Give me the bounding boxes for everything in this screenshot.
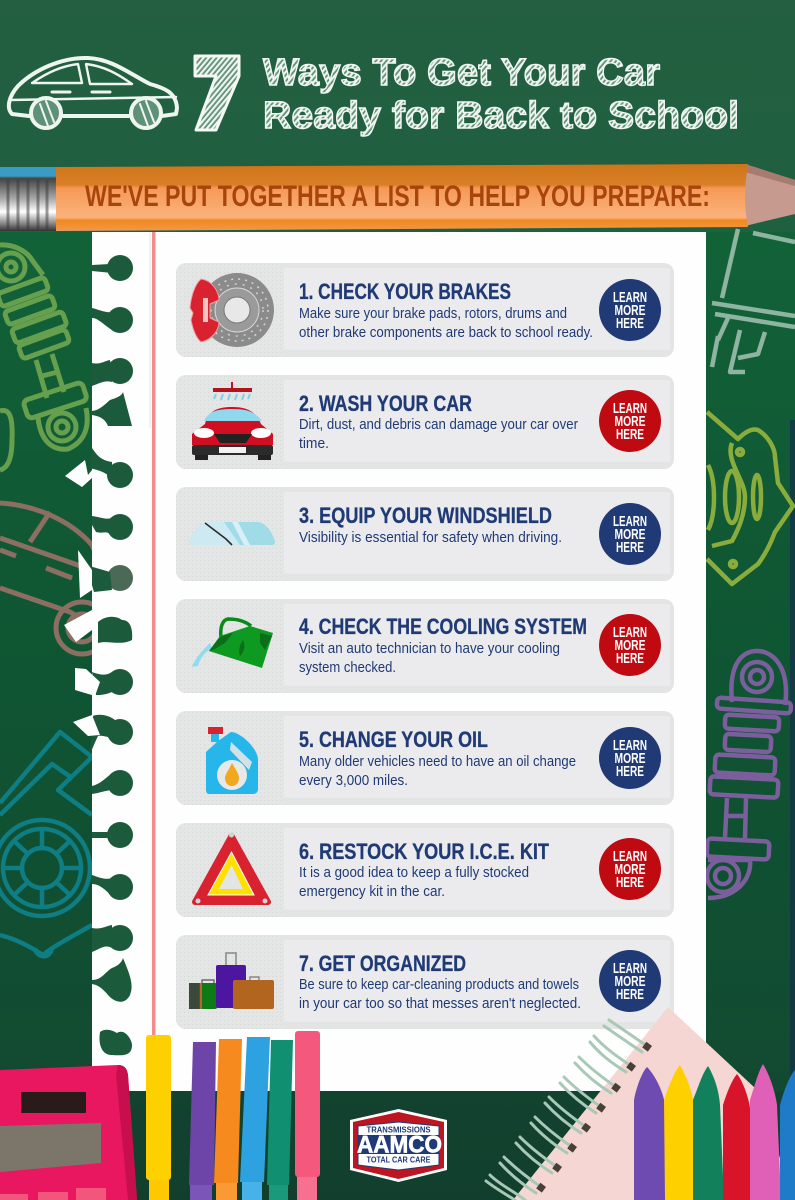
description: It is a good idea to keep a fully stocked	[299, 865, 529, 881]
title	[9, 52, 739, 137]
button: learn more here: MORE	[614, 751, 646, 767]
pink crayon	[750, 1064, 781, 1200]
paper sheet	[64, 232, 706, 1091]
headline: Ready for Back to School	[263, 95, 739, 137]
calculator	[0, 1065, 137, 1200]
button: learn more here	[599, 614, 661, 676]
pencil body	[56, 164, 748, 231]
AAMCO logo: TRANSMISSIONS	[366, 1124, 431, 1134]
description: time.	[299, 436, 329, 452]
description	[299, 865, 529, 900]
button: learn more here: HERE	[616, 427, 644, 443]
button: learn more here: MORE	[614, 638, 646, 654]
description: other brake components are back to school ready.	[299, 325, 593, 341]
button: learn more here: LEARN	[613, 290, 647, 306]
button: learn more here	[599, 950, 661, 1012]
pink marker	[295, 1031, 320, 1200]
description: Visit an auto technician to have your cooling	[299, 641, 560, 657]
icon: brake disc	[190, 273, 274, 347]
panel: 6 restock your ice kit	[176, 823, 674, 917]
button: learn more here: HERE	[616, 540, 644, 556]
heading: 6. RESTOCK YOUR I.C.E. KIT	[299, 839, 549, 864]
button: learn more here: LEARN	[613, 961, 647, 977]
button: learn more here: LEARN	[613, 849, 647, 865]
heading: 3. EQUIP YOUR WINDSHIELD	[299, 503, 552, 528]
red crayon	[723, 1074, 753, 1200]
button: learn more here: HERE	[616, 875, 644, 891]
AAMCO logo	[350, 1109, 447, 1182]
chalk doodle: purple shock absorber right	[707, 651, 791, 898]
button: learn more here	[599, 390, 661, 452]
description	[299, 641, 560, 676]
green crayon	[693, 1066, 724, 1200]
button: learn more here: LEARN	[613, 625, 647, 641]
description	[299, 977, 581, 1012]
button: learn more here: LEARN	[613, 514, 647, 530]
heading: 4. CHECK THE COOLING SYSTEM	[299, 614, 587, 639]
markers	[146, 1031, 320, 1200]
panel: 4 check the cooling system	[176, 599, 674, 693]
heading: 1. CHECK YOUR BRAKES	[299, 279, 511, 304]
yellow crayon	[664, 1065, 696, 1200]
chalk doodle: green shock absorber	[0, 245, 88, 470]
headline: Ways To Get Your Car	[263, 52, 660, 94]
button: learn more here: LEARN	[613, 738, 647, 754]
button: learn more here	[599, 503, 661, 565]
heading: 2. WASH YOUR CAR	[299, 391, 472, 416]
pencil tip	[745, 164, 795, 226]
blue marker	[240, 1037, 270, 1200]
chalk doodle: brown car	[0, 503, 108, 654]
description: in your car too so that messes aren't neglected.	[299, 996, 581, 1012]
icon: luggage	[189, 953, 274, 1009]
yellow marker	[146, 1035, 171, 1200]
panel: 1 check your brakes	[176, 263, 674, 357]
icon: oil container	[206, 727, 258, 794]
AAMCO logo: AAMCO	[357, 1132, 442, 1158]
chalk doodle: grey parts top right	[712, 229, 795, 372]
description: Visibility is essential for safety when driving.	[299, 530, 562, 546]
pencil ferrule	[0, 167, 56, 231]
panel: 2 wash your car	[176, 375, 674, 469]
description: Be sure to keep car-cleaning products and towels	[299, 977, 579, 993]
blue crayon	[780, 1070, 795, 1200]
icon: chalk car	[9, 58, 177, 128]
description: Make sure your brake pads, rotors, drums and	[299, 306, 567, 322]
green marker	[267, 1040, 293, 1200]
crayons	[634, 1064, 795, 1200]
icon: warning triangle	[195, 832, 268, 904]
button: learn more here: MORE	[614, 862, 646, 878]
description	[299, 306, 593, 341]
description: Dirt, dust, and debris can damage your car over	[299, 417, 578, 433]
headline	[263, 52, 739, 137]
panel: 7 get organized	[176, 935, 674, 1029]
description	[299, 754, 576, 789]
icon: car being washed	[192, 382, 273, 460]
panel: 3 equip your windshield	[176, 487, 674, 581]
orange marker	[214, 1039, 242, 1200]
notebook holes	[86, 255, 133, 1055]
button: learn more here: MORE	[614, 974, 646, 990]
purple crayon	[634, 1067, 667, 1200]
button: learn more here	[599, 838, 661, 900]
button: learn more here: HERE	[616, 651, 644, 667]
button: learn more here: LEARN	[613, 401, 647, 417]
button: learn more here: HERE	[616, 987, 644, 1003]
button: learn more here: HERE	[616, 764, 644, 780]
large numeral 7	[195, 56, 239, 130]
panel: 5 change your oil	[176, 711, 674, 805]
description: emergency kit in the car.	[299, 884, 445, 900]
AAMCO logo: TOTAL CAR CARE	[366, 1154, 431, 1164]
pencil banner	[0, 164, 795, 231]
description: Many older vehicles need to have an oil change	[299, 754, 576, 770]
button: learn more here: MORE	[614, 303, 646, 319]
purple marker	[189, 1042, 216, 1200]
torn paper pieces	[64, 460, 100, 736]
button: learn more here: MORE	[614, 527, 646, 543]
description	[299, 417, 578, 452]
red margin line	[152, 232, 156, 1044]
button: learn more here: MORE	[614, 414, 646, 430]
heading: 5. CHANGE YOUR OIL	[299, 727, 488, 752]
icon: pouring coolant jug	[192, 619, 273, 668]
spiral notebook	[486, 1007, 795, 1200]
button: learn more here	[599, 727, 661, 789]
description: system checked.	[299, 660, 396, 676]
button: learn more here	[599, 279, 661, 341]
heading: 7. GET ORGANIZED	[299, 951, 466, 976]
description: every 3,000 miles.	[299, 773, 408, 789]
button: learn more here: HERE	[616, 316, 644, 332]
chalk doodle: teal wheel and wrench	[0, 732, 92, 956]
spiral binding	[486, 1020, 647, 1200]
chalk doodle: yellow-green gear right	[707, 412, 793, 584]
icon: windshield with wiper	[190, 522, 275, 545]
